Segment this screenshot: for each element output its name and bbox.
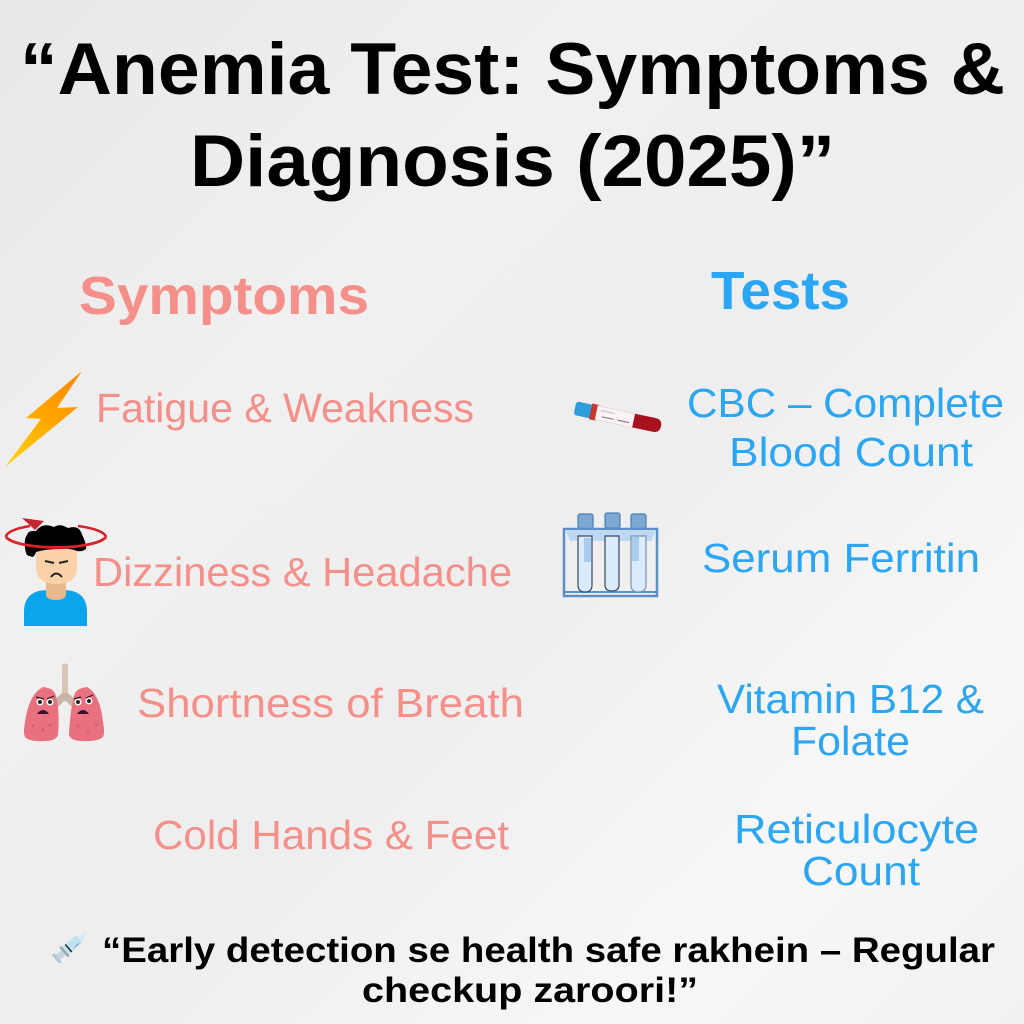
title: “Anemia Test: Symptoms & xyxy=(20,29,1005,110)
test: CBC: CBC – Complete xyxy=(687,380,1004,426)
icon: lightning bolt xyxy=(5,371,82,467)
footer message xyxy=(51,927,995,1010)
icon: blood tube xyxy=(573,400,663,434)
test: reticulocyte: Count xyxy=(802,848,921,894)
title xyxy=(20,29,1005,202)
test: vitamin B12: Folate xyxy=(791,718,910,764)
symptom: dizziness: Dizziness & Headache xyxy=(93,549,512,595)
panel: tests xyxy=(564,380,1004,894)
icon: sad lungs xyxy=(24,664,104,741)
test: reticulocyte xyxy=(734,806,979,894)
icon: syringe xyxy=(51,927,91,964)
symptom: cold hands: Cold Hands & Feet xyxy=(153,812,510,858)
heading: Symptoms: Symptoms xyxy=(79,266,369,326)
panel: symptoms xyxy=(5,371,524,858)
test: CBC xyxy=(687,380,1004,475)
heading: Tests: Tests xyxy=(711,261,850,321)
icon: test tube rack xyxy=(564,513,657,596)
test: serum ferritin: Serum Ferritin xyxy=(702,535,980,581)
symptom: fatigue: Fatigue & Weakness xyxy=(96,385,474,431)
title: Diagnosis (2025)” xyxy=(190,121,835,202)
test: vitamin B12 xyxy=(717,676,984,764)
test: CBC: Blood Count xyxy=(729,429,974,475)
footer message: “Early detection se health safe rakhein – Regular xyxy=(102,931,995,970)
symptom: breath: Shortness of Breath xyxy=(137,680,524,726)
test: vitamin B12: Vitamin B12 & xyxy=(717,676,984,722)
test: reticulocyte: Reticulocyte xyxy=(734,806,979,852)
icon: dizzy person xyxy=(6,518,106,626)
footer message: checkup zaroori!” xyxy=(362,971,698,1010)
